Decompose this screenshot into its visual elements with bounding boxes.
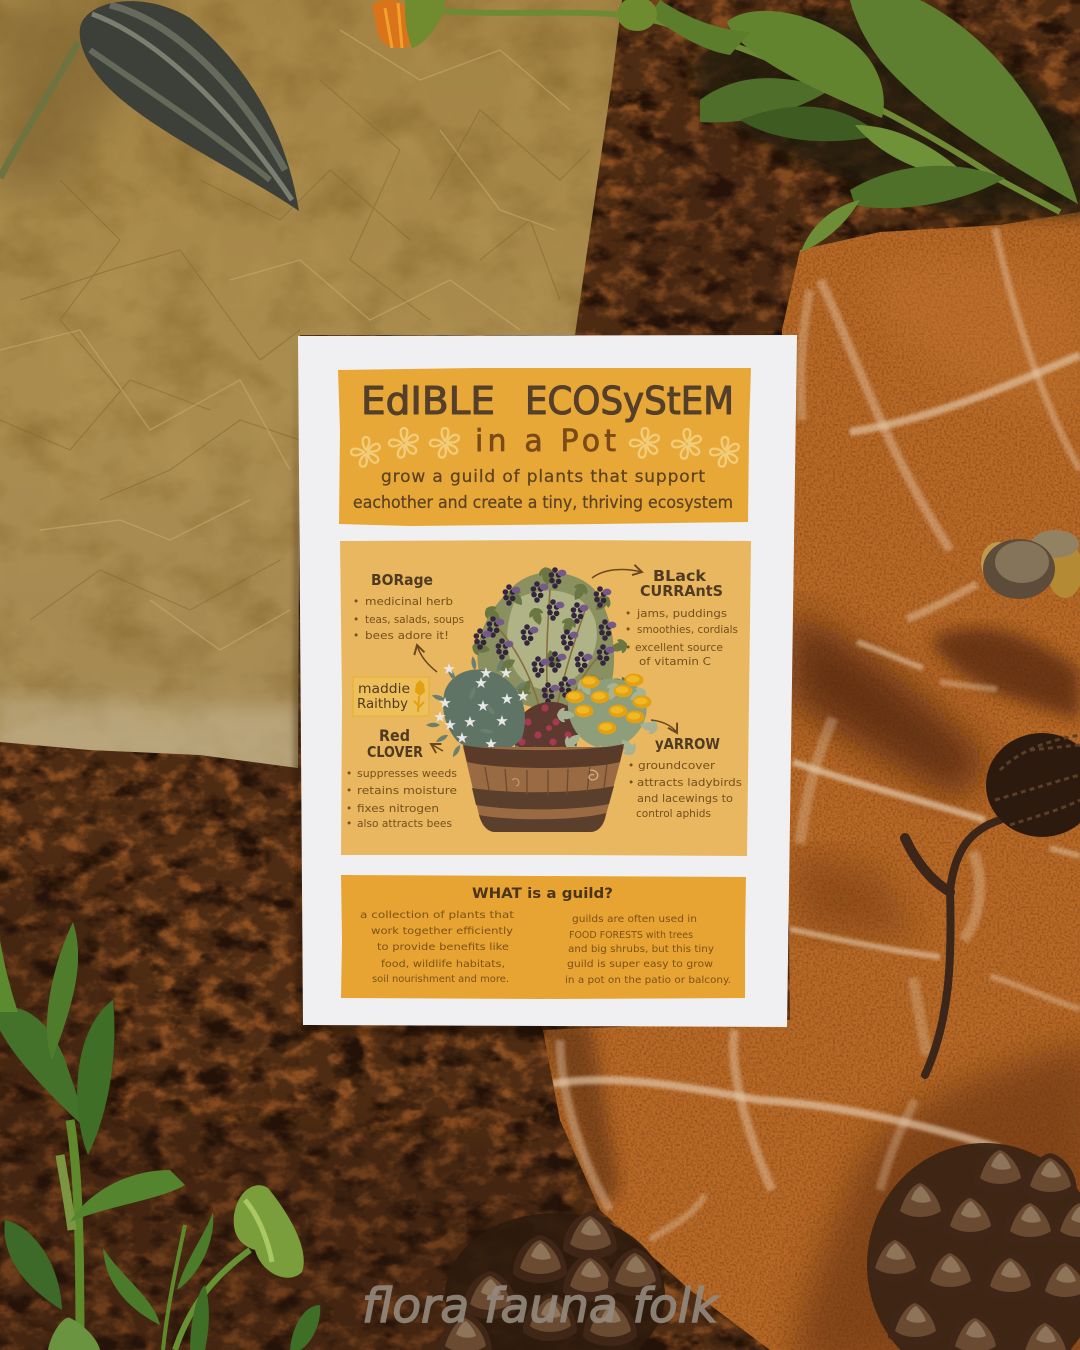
label: black currants: • [625,608,631,620]
icon: pine cone bottom centre [438,1211,665,1350]
crumpled baking paper [0,0,640,780]
decorative flowers left [351,428,460,467]
text: guild definition: work together efficiently [371,926,513,937]
text: guild usage: in a pot on the patio or balcony. [565,975,731,986]
card shadow [294,340,548,1036]
label: borage: • [353,630,359,642]
orange plaid cloth [540,210,1080,1350]
label: red clover: retains moisture [357,785,457,797]
subtitle text: eachother and create a tiny, thriving ecosystem [353,493,733,513]
label: borage: • [353,596,359,608]
text: guild usage [565,914,731,986]
label: red clover: CLOVER [367,743,423,761]
text: guild usage: guilds are often used in [572,914,697,925]
heading: Edible Ecosystem: EdIBLE [361,379,495,423]
label: yarrow: • [628,760,634,772]
red clover [515,702,580,757]
label: yarrow: • [628,777,634,789]
icon: acorns on cloth [981,530,1080,599]
icon: orange calendula bud [372,0,445,48]
label: red clover: • [346,768,352,780]
label: red clover: also attracts bees [357,818,452,830]
text: guild definition: to provide benefits like [377,942,509,953]
panel: title banner [338,368,751,526]
label: red clover: • [346,818,352,830]
label: yarrow: and lacewings to [637,793,733,805]
heading: what is a guild: WHAT is a guild? [472,886,613,902]
text: guild definition: soil nourishment and more. [372,974,509,985]
label: yarrow: groundcover [638,760,716,772]
label: red clover: fixes nitrogen [357,803,439,815]
label: red clover [346,726,457,830]
text: guild definition: a collection of plants that [360,910,514,921]
watermark: flora fauna folk: flora fauna folk [362,1279,720,1334]
arrow: to borage [417,645,437,672]
illustration: plant pot guild [426,566,659,832]
label: yarrow [628,735,742,820]
label: black currants: • [625,642,631,654]
arrow: to red clover [431,744,443,751]
subtitle text: grow a guild of plants that support [381,467,705,487]
text: guild usage: FOOD FORESTS with trees [569,930,693,941]
label: borage: • [353,614,359,626]
subtitle text [353,467,733,513]
white printed card [298,335,797,1027]
label: black currants [625,567,738,668]
label: red clover: • [346,785,352,797]
black currant bush [471,566,629,715]
decorative plaid lines [552,228,1080,1240]
label: yarrow: attracts ladybirds [637,777,742,789]
yarrow [557,674,659,764]
label: black currants: excellent source [635,642,723,654]
signature: Maddie Raithby: Raithby [357,697,408,712]
label: red clover: Red [379,726,410,745]
label: black currants: smoothies, cordials [637,624,738,636]
heading: Edible Ecosystem: ECOSyStEM [525,379,734,423]
icon: alder cone on twig [905,733,1080,1075]
icon: green plant sprig top right [430,0,1080,252]
borage [426,656,529,766]
label: borage: teas, salads, soups [365,614,464,626]
decorative creases [0,80,590,620]
label: red clover: suppresses weeds [357,768,457,780]
text: guild usage: guild is super easy to grow [567,959,713,970]
label: black currants: jams, puddings [636,608,727,620]
text: guild usage: and big shrubs, but this tiny [568,944,714,955]
wooden barrel [463,744,624,832]
label: red clover: • [346,803,352,815]
text: guild definition: food, wildlife habitats, [381,959,505,970]
panel: plant guild illustration [340,540,751,856]
label: black currants: BLack [653,567,707,585]
decorative shading [790,610,990,800]
heading: Edible Ecosystem [361,379,734,423]
label: borage [353,571,464,642]
heading: in a pot: in a Pot [475,424,616,459]
label: black currants: of vitamin C [639,656,711,668]
arrow: to black currants [592,570,642,578]
label: borage: medicinal herb [365,596,453,608]
icon: green plant sprig bottom left [0,922,320,1350]
text: guild definition [360,910,514,985]
arrow: to yarrow [651,720,677,733]
signature: Maddie Raithby: maddie [358,682,410,697]
decorative flowers right [630,428,740,467]
label: black currants: CURRAntS [640,582,723,600]
label: yarrow: control aphids [636,808,711,820]
label: black currants: • [625,624,631,636]
label: borage: BORage [371,571,433,589]
label: borage: bees adore it! [365,630,449,642]
panel: what is a guild [341,875,746,999]
icon: striped dark leaf with stem [0,1,299,211]
signature: Maddie Raithby [353,677,429,716]
icon: pine cone bottom right [867,1143,1080,1350]
label: yarrow: yARROW [655,735,720,753]
